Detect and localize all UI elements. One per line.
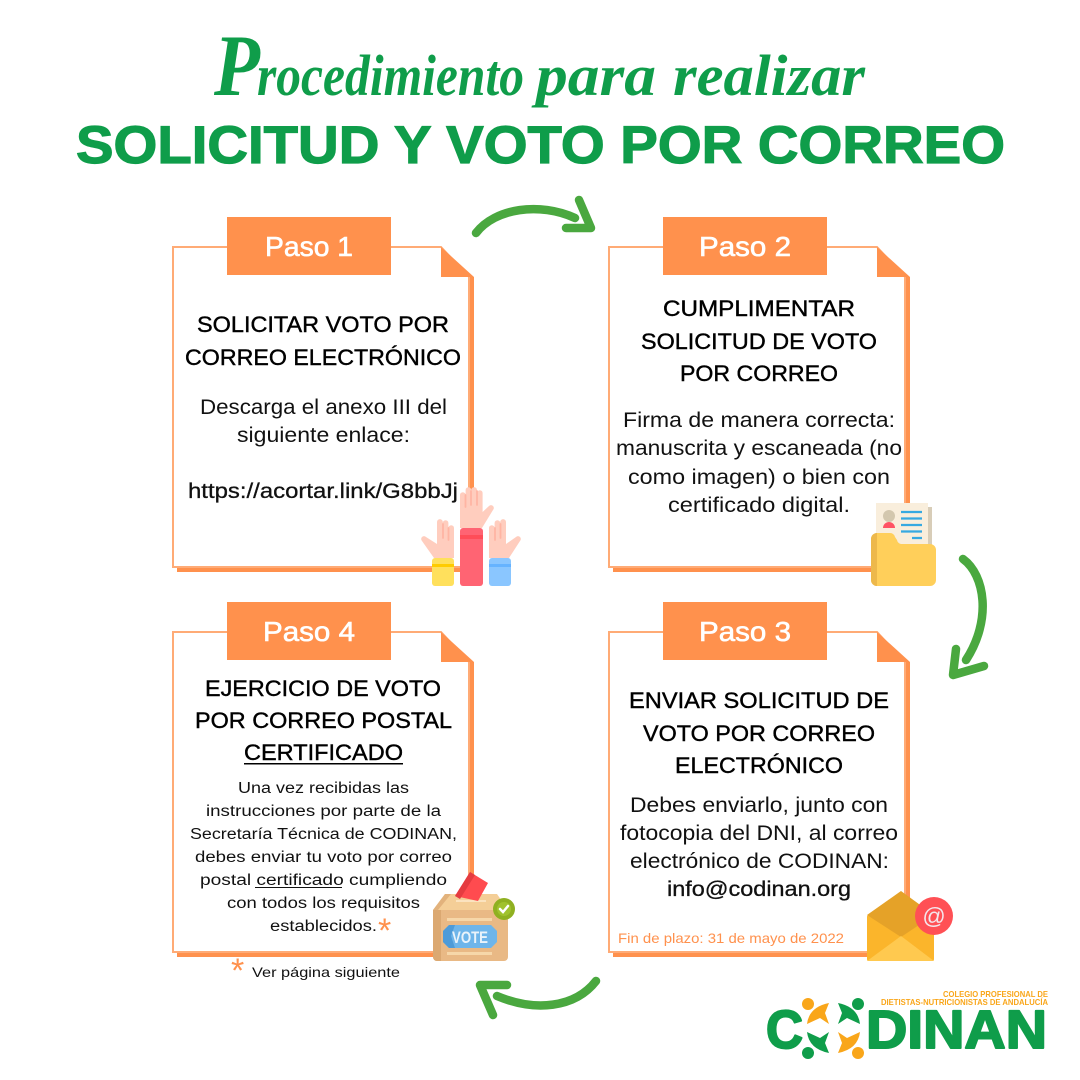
text block: paso 4: Una vez recibidas las: [238, 780, 409, 797]
logo: CODINAN: [766, 989, 1048, 1060]
label: paso 4: Paso 4: [263, 616, 355, 647]
text block: paso 4: debes enviar tu voto por correo: [195, 849, 452, 866]
heading: paso 2: SOLICITUD DE VOTO: [641, 329, 877, 354]
icon: envelope with at sign: @: [922, 903, 946, 929]
text block: paso 2: como imagen) o bien con: [628, 466, 890, 489]
text block: paso 4: Secretaría Técnica de CODINAN,: [190, 826, 457, 843]
heading: paso 3: ENVIAR SOLICITUD DE: [629, 688, 889, 713]
arrow: paso 1 to paso 2: [476, 200, 591, 233]
footnote: [231, 952, 400, 990]
text block: paso 1: https://acortar.link/G8bbJj: [188, 480, 458, 503]
text block: paso 4: *: [378, 912, 391, 950]
heading: paso 3: ELECTRÓNICO: [675, 753, 843, 778]
logo tagline: [881, 989, 1048, 1007]
icon: folder with document: [871, 503, 936, 586]
logo wordmark: [766, 1000, 1047, 1060]
text block: paso 1: siguiente enlace:: [237, 424, 410, 447]
heading: paso 3: [629, 688, 889, 778]
icon: raised hands: [421, 487, 521, 586]
text block: paso 4: instrucciones por parte de la: [206, 803, 441, 820]
panel: paso 4: [173, 602, 474, 957]
heading: paso 1: [185, 312, 461, 370]
title: script line: realizar: [673, 43, 865, 108]
text block: paso 3: fotocopia del DNI, al correo: [620, 822, 898, 845]
heading: paso 4: [195, 676, 452, 765]
footnote: *: [231, 952, 244, 990]
arrow: paso 3 to paso 4: [480, 981, 596, 1015]
logo tagline: DIETISTAS-NUTRICIONISTAS DE ANDALUCÍA: [881, 997, 1048, 1007]
label: paso 3: Paso 3: [699, 616, 791, 647]
icon: envelope with at sign: [867, 891, 953, 961]
logo tagline: COLEGIO PROFESIONAL DE: [943, 989, 1048, 999]
title: script line: rocedimiento: [257, 43, 524, 108]
text block: paso 2: manuscrita y escaneada (no: [616, 437, 902, 460]
panel: paso 1: [173, 217, 474, 572]
logo mark: [802, 998, 864, 1059]
logo wordmark: C: [766, 1000, 803, 1060]
text block: paso 1: [188, 396, 458, 503]
panel: paso 2: [609, 217, 910, 572]
label: paso 1: Paso 1: [265, 231, 353, 262]
panel: paso 3: [609, 602, 910, 957]
text block: paso 2: certificado digital.: [668, 494, 850, 517]
text block: paso 3: [620, 794, 898, 901]
heading: paso 4: CERTIFICADO: [244, 740, 403, 765]
logo wordmark: DINAN: [866, 1000, 1047, 1060]
text block: paso 2: Firma de manera correcta:: [623, 409, 895, 432]
title: script line: [213, 18, 865, 115]
footnote: Ver página siguiente: [252, 964, 400, 980]
heading: paso 4: EJERCICIO DE VOTO: [205, 676, 441, 701]
heading: paso 1: SOLICITAR VOTO POR: [197, 312, 449, 337]
heading: paso 2: POR CORREO: [680, 361, 838, 386]
title: main heading: SOLICITUD Y VOTO POR CORREO: [76, 116, 1005, 175]
text block: paso 3: Debes enviarlo, junto con: [630, 794, 888, 817]
text block: paso 2: [616, 409, 902, 517]
text block: paso 4: con todos los requisitos: [227, 895, 420, 912]
icon: ballot box: [433, 872, 515, 961]
text block: paso 4: [190, 780, 457, 950]
text block: paso 1: Descarga el anexo III del: [200, 396, 447, 419]
text block: paso 4: establecidos.: [270, 918, 377, 935]
label: paso 2: Paso 2: [699, 231, 791, 262]
title: script line: P: [213, 18, 261, 115]
text block: paso 3: electrónico de CODINAN:: [630, 850, 889, 873]
heading: paso 2: [641, 296, 877, 386]
heading: paso 2: CUMPLIMENTAR: [663, 296, 855, 321]
heading: paso 4: POR CORREO POSTAL: [195, 708, 452, 733]
heading: paso 3: VOTO POR CORREO: [643, 721, 875, 746]
icon: ballot box: VOTE: [452, 928, 488, 947]
title: script line: para: [531, 43, 656, 108]
text block: paso 3: info@codinan.org: [667, 878, 851, 901]
text block: paso 4: postal certificado cumpliendo: [200, 872, 447, 889]
heading: paso 1: CORREO ELECTRÓNICO: [185, 345, 461, 370]
arrow: paso 2 to paso 3: [953, 559, 984, 675]
deadline note: Fin de plazo: 31 de mayo de 2022: [618, 930, 844, 946]
